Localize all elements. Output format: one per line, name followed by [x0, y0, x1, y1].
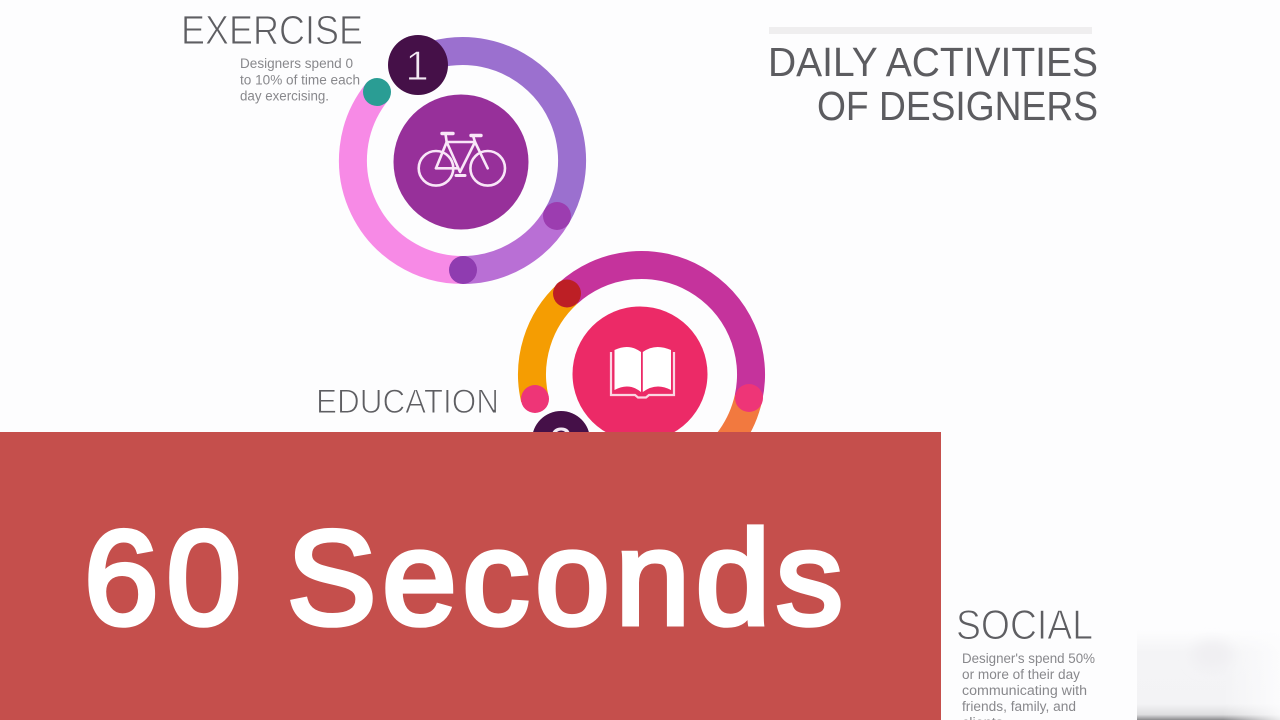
title rule: [769, 27, 1092, 34]
banner text: 60: [84, 504, 241, 653]
icon: bicycle: [419, 134, 505, 186]
marker: red: [553, 280, 581, 308]
number badge 2: [532, 411, 590, 469]
icon: open book: [611, 347, 674, 398]
text block: exercise description: Designers spend 0: [240, 56, 353, 71]
number badge 1: [388, 35, 448, 95]
heading: education: EDUCATION: [316, 383, 499, 421]
ring segment: pink: [353, 92, 463, 270]
center circle: [394, 94, 528, 230]
ring segment: lower purple: [463, 216, 557, 270]
text block: social description: communicating with: [962, 683, 1087, 698]
title block: [768, 27, 1098, 129]
number badge 2: 2: [550, 419, 572, 465]
text block: exercise description: day exercising.: [240, 88, 329, 104]
text block: social description: friends, family, and: [962, 699, 1076, 714]
text block: social description: or more of their day: [962, 667, 1080, 682]
heading: exercise: EXERCISE: [181, 7, 363, 53]
marker: purple bottom: [449, 256, 477, 284]
number badge 1: 1: [405, 42, 429, 89]
marker: teal: [363, 78, 391, 106]
center circle: [572, 306, 708, 442]
marker: pink right: [735, 384, 763, 412]
text block: exercise description: to 10% of time each: [240, 72, 360, 88]
marker: pink left: [521, 385, 549, 413]
text block: social description: [962, 651, 1095, 720]
blurred corner block: [1137, 630, 1280, 720]
banner: [0, 432, 941, 720]
ring segment: magenta: [568, 265, 751, 398]
panel: exercise ring: [353, 35, 572, 284]
text block: exercise description: [240, 56, 360, 104]
banner text: Seconds: [287, 504, 843, 653]
ring segment: amber: [532, 294, 568, 399]
ring segment: orange red: [700, 398, 748, 467]
text block: social description: Designer's spend 50%: [962, 651, 1095, 666]
heading: social: SOCIAL: [956, 601, 1093, 648]
marker: purple right: [543, 202, 571, 230]
ring segment: upper purple: [416, 51, 572, 216]
title: OF DESIGNERS: [817, 83, 1098, 129]
panel: education ring: [521, 265, 763, 469]
title: DAILY ACTIVITIES: [768, 39, 1098, 85]
title: [768, 39, 1098, 129]
